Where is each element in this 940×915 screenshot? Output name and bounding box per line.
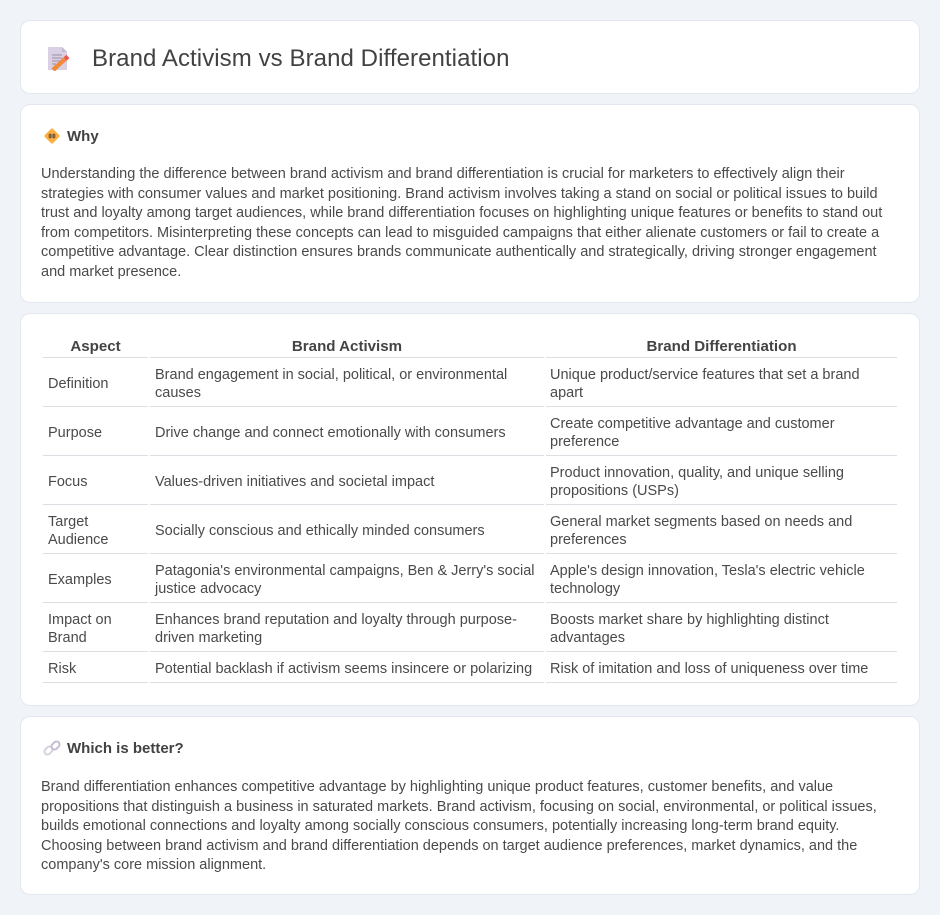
- text block: why explanation: and market presence.: [41, 264, 181, 280]
- text block: which is better explanation: propositions that distinguish a business in saturated markets. Brand activism, focusing on social, environmental, or political issues,: [41, 798, 877, 814]
- text block: why explanation: strategies with consumer values and market positioning. Brand activism involves taking a stand on social or political issues to build: [41, 186, 878, 202]
- table header row: Brand Differentiation: [646, 338, 797, 355]
- row: examples: Patagonia's environmental campaigns, Ben & Jerry's social: [155, 563, 535, 579]
- table header row: [70, 338, 797, 355]
- row: risk: Risk of imitation and loss of uniqueness over time: [550, 661, 868, 677]
- row: focus: Values-driven initiatives and societal impact: [155, 474, 434, 490]
- row: purpose: Purpose: [48, 425, 102, 441]
- row: focus: Focus: [48, 474, 88, 490]
- panel: title header: [20, 20, 920, 94]
- row: examples: justice advocacy: [155, 581, 261, 597]
- text block: why explanation: from competitors. Misinterpreting these concepts can lead to misguided campaigns that either alienate customers or fail to create a: [41, 224, 879, 240]
- text block: which is better explanation: [41, 779, 877, 873]
- row: definition: [48, 367, 860, 401]
- heading: why: Why: [67, 128, 99, 145]
- row: purpose: Create competitive advantage and customer: [550, 416, 835, 432]
- row: definition: causes: [155, 385, 201, 401]
- text block: which is better explanation: Brand differentiation enhances competitive advantage by highlighting unique product features, customer benefits, and value: [41, 779, 833, 795]
- row: target audience: Socially conscious and ethically minded consumers: [155, 523, 485, 539]
- icon: link: [44, 740, 60, 756]
- row: risk: [48, 661, 868, 677]
- row: examples: technology: [550, 581, 620, 597]
- text block: why explanation: [41, 166, 882, 280]
- row: focus: [48, 465, 844, 499]
- row: target audience: [48, 514, 852, 548]
- row: definition: apart: [550, 385, 583, 401]
- text block: which is better explanation: builds emotional connections and loyalty among socially conscious consumers, potentially increasing long-term brand equity.: [41, 818, 839, 834]
- text block: which is better explanation: Choosing between brand activism and brand differentiation depends on target audience preferences, market dynamics, and the: [41, 838, 857, 854]
- row: risk: Potential backlash if activism seems insincere or polarizing: [155, 661, 532, 677]
- text block: why explanation: competitive advantage. Clear distinction ensures brands communicate authentically and strategically, driving stronger engagement: [41, 244, 877, 260]
- row: impact on brand: driven marketing: [155, 630, 262, 646]
- row: impact on brand: Impact on: [48, 612, 112, 628]
- row: risk: Risk: [48, 661, 76, 677]
- row: target audience: General market segments based on needs and: [550, 514, 852, 530]
- row: target audience: Audience: [48, 532, 108, 548]
- row: impact on brand: [48, 612, 829, 646]
- icon: warning diamond: [44, 128, 60, 144]
- row: impact on brand: Boosts market share by highlighting distinct: [550, 612, 829, 628]
- panel: why: [20, 104, 920, 303]
- title: Brand Activism vs Brand Differentiation: [92, 45, 510, 72]
- heading: which is better: Which is better?: [67, 740, 184, 757]
- row: purpose: Drive change and connect emotionally with consumers: [155, 425, 506, 441]
- row: purpose: [48, 416, 835, 450]
- row: impact on brand: Brand: [48, 630, 87, 646]
- row: focus: propositions (USPs): [550, 483, 679, 499]
- row: purpose: preference: [550, 434, 619, 450]
- row: definition: Brand engagement in social, political, or environmental: [155, 367, 507, 383]
- row: target audience: Target: [48, 514, 88, 530]
- row: examples: Examples: [48, 572, 112, 588]
- text block: why explanation: Understanding the difference between brand activism and brand differentiation is crucial for marketers to effectively align their: [41, 166, 845, 182]
- table header row: Aspect: [70, 338, 121, 355]
- panel: comparison table: [20, 313, 920, 706]
- text block: why explanation: trust and loyalty among target audiences, while brand differentiation focuses on highlighting unique features or benefits to stand out: [41, 205, 882, 221]
- row: examples: Apple's design innovation, Tesla's electric vehicle: [550, 563, 865, 579]
- panel: which is better: [20, 716, 920, 895]
- row: target audience: preferences: [550, 532, 627, 548]
- icon: memo with pencil: [48, 47, 70, 71]
- row: examples: [48, 563, 865, 597]
- row: definition: Unique product/service features that set a brand: [550, 367, 860, 383]
- row: impact on brand: advantages: [550, 630, 625, 646]
- row: focus: Product innovation, quality, and unique selling: [550, 465, 844, 481]
- table header row: Brand Activism: [292, 338, 402, 355]
- row: impact on brand: Enhances brand reputation and loyalty through purpose-: [155, 612, 517, 628]
- text block: which is better explanation: company's core mission alignment.: [41, 857, 266, 873]
- row: definition: Definition: [48, 376, 108, 392]
